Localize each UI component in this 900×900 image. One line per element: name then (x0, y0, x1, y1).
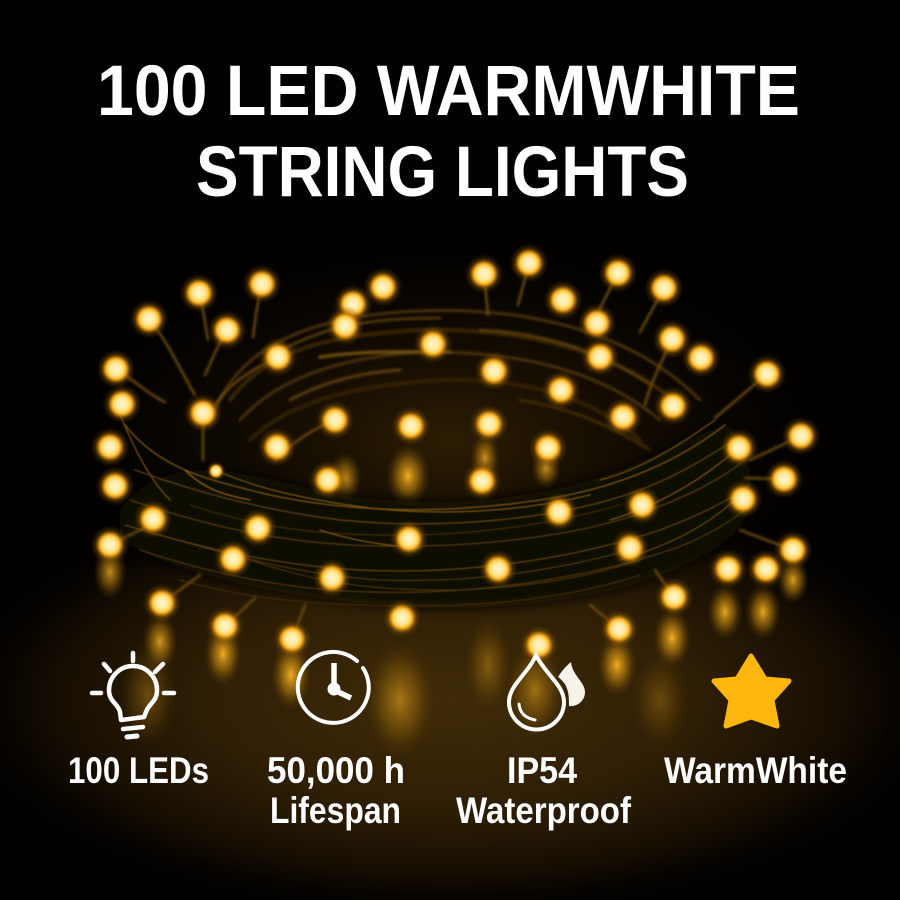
front coil of cable (120, 415, 751, 608)
feature: warm white (664, 656, 847, 791)
title (97, 52, 800, 212)
label: WarmWhite (664, 750, 847, 791)
label: 50,000 h (267, 750, 405, 791)
light reflections (93, 432, 809, 760)
feature: 100 LEDs (68, 653, 209, 791)
title: STRING LIGHTS (196, 133, 689, 212)
label: IP54 (507, 750, 577, 791)
feature: IP54 waterproof: Waterproof (456, 790, 632, 831)
feature: 50,000 h lifespan (267, 652, 405, 831)
icon: water drops (509, 655, 585, 729)
bulb wires (110, 263, 801, 639)
back coil of cable (215, 310, 700, 450)
icon: clock (298, 652, 369, 723)
title: 100 LED WARMWHITE (97, 52, 800, 131)
label: 100 LEDs (68, 750, 209, 791)
LED bulbs (90, 243, 821, 665)
feature: 50,000 h lifespan: Lifespan (270, 790, 401, 831)
icon: light bulb (92, 653, 174, 737)
icon: star (714, 656, 789, 726)
feature: IP54 waterproof (456, 655, 632, 831)
